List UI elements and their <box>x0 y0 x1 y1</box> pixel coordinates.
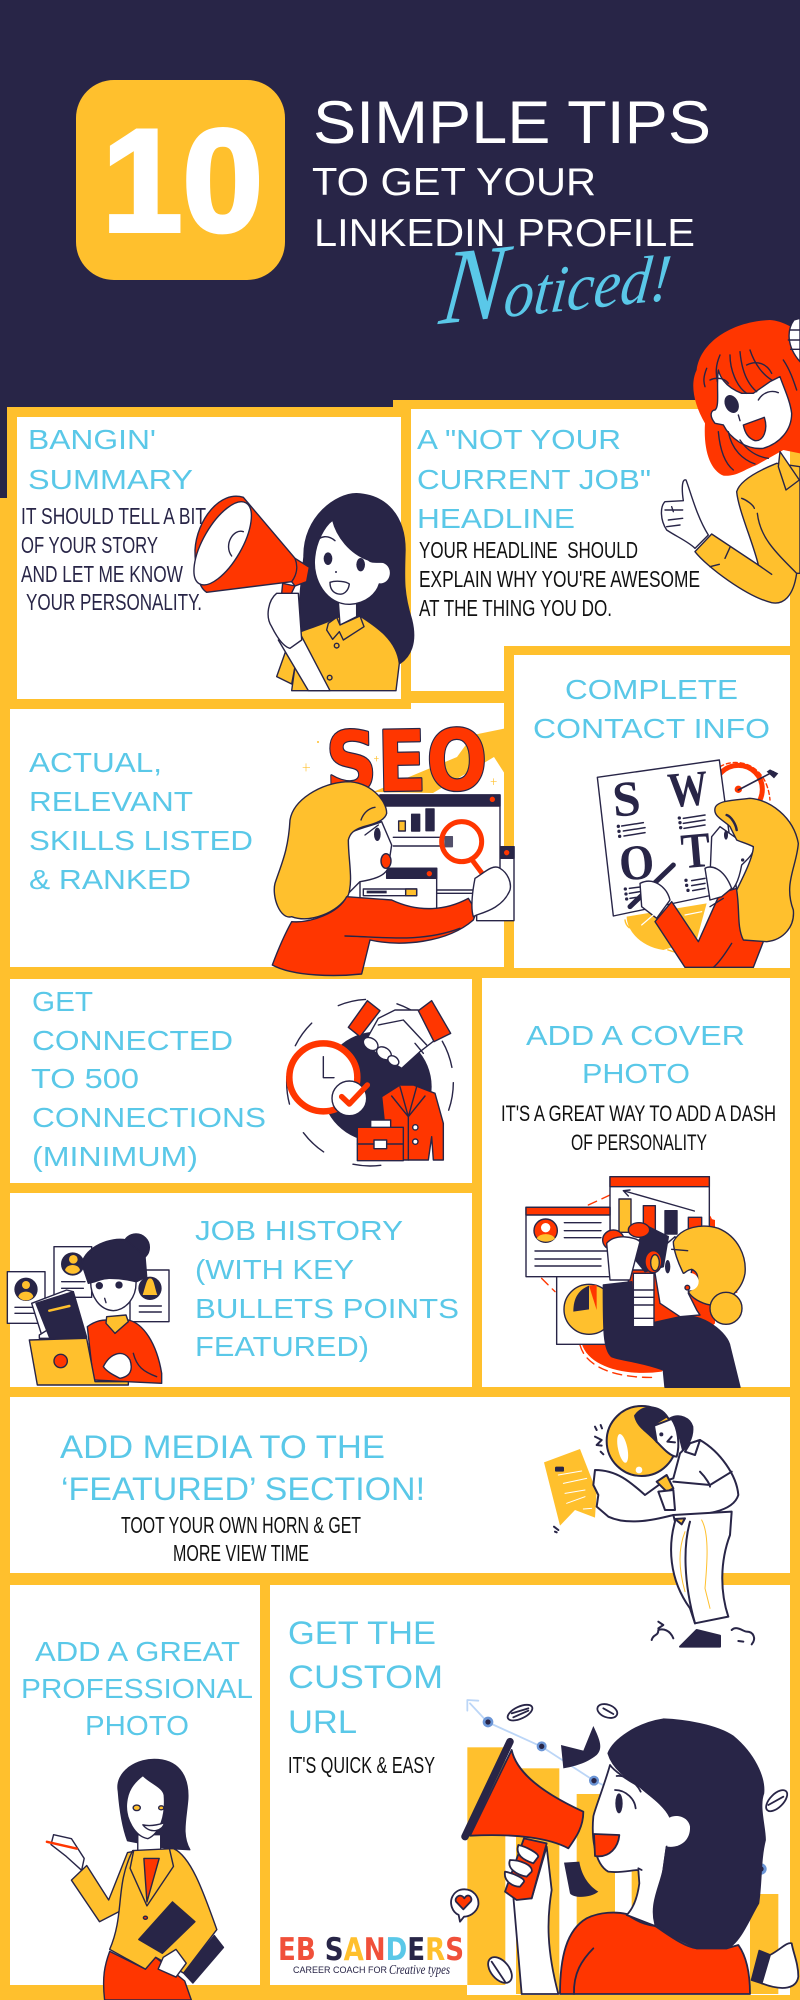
logo: EB Sanders: CAREER COACH FOR <box>293 1965 387 1976</box>
header <box>76 80 711 348</box>
title text: LINKEDIN PROFILE <box>314 212 695 255</box>
panel: job history: FEATURED) <box>195 1331 369 1362</box>
panel: complete contact info: COMPLETE <box>565 674 738 705</box>
panel: actual relevant skills: RELEVANT <box>29 786 193 817</box>
illustration: SWOT chart woman: O <box>617 833 656 892</box>
title text <box>312 89 711 255</box>
panel: job history: (WITH KEY <box>195 1254 354 1285</box>
illustration: SWOT chart woman: S <box>610 769 643 828</box>
illustration: SEO woman <box>272 711 514 975</box>
panel: not your current job headline: EXPLAIN WHY YOU'RE AWESOME <box>419 566 700 592</box>
panel: professional photo <box>10 1585 260 1985</box>
panel: get connected: CONNECTED <box>32 1025 233 1056</box>
panel: actual relevant skills <box>10 703 504 967</box>
panel: actual relevant skills: & RANKED <box>29 864 191 895</box>
panel: get connected: GET <box>32 986 93 1017</box>
illustration: SWOT chart woman: W <box>665 759 710 818</box>
illustration: woman with binoculars and charts <box>526 1177 745 1387</box>
panel: not your current job headline: YOUR HEADLINE SHOULD <box>419 537 638 563</box>
panel: add a cover photo <box>482 978 790 1387</box>
panel: not your current job headline: AT THE THING YOU DO. <box>419 595 612 621</box>
illustration: woman with megaphone <box>183 493 414 691</box>
panel: add a cover photo: ADD A COVER <box>526 1020 745 1051</box>
panel: add a cover photo: PHOTO <box>582 1058 690 1089</box>
panel: not your current job headline: A "NOT YOUR <box>417 424 621 455</box>
panel: bangin summary <box>7 407 411 709</box>
panel: complete contact info <box>504 646 800 978</box>
title text: SIMPLE TIPS <box>313 89 711 156</box>
number badge: 10 <box>102 99 263 262</box>
panel: custom url: URL <box>288 1704 357 1740</box>
title text: TO GET YOUR <box>312 161 596 204</box>
panel: get connected: CONNECTIONS <box>32 1102 266 1133</box>
panel: not your current job headline <box>393 400 800 703</box>
panel: professional photo: PROFESSIONAL <box>21 1673 253 1704</box>
panel: custom url: CUSTOM <box>288 1659 443 1695</box>
panel: add media <box>10 1397 790 1573</box>
SEO lettering: SEO <box>325 711 488 812</box>
panel: bangin summary: SUMMARY <box>28 464 193 495</box>
panel: add media: ‘FEATURED’ SECTION! <box>61 1471 425 1507</box>
illustration: winking woman with thumbs up <box>661 318 800 603</box>
panel: actual relevant skills: SKILLS LISTED <box>29 825 253 856</box>
panel: add media: MORE VIEW TIME <box>173 1540 309 1566</box>
panel: job history <box>10 1193 472 1387</box>
panel: actual relevant skills: ACTUAL, <box>29 747 162 778</box>
panel: get connected: (MINIMUM) <box>32 1141 198 1172</box>
panel: bangin summary: AND LET ME KNOW <box>21 561 183 587</box>
illustration: woman shouting into megaphone with bars <box>451 1700 798 1994</box>
panel: custom url <box>270 1585 790 1995</box>
panel: bangin summary: OF YOUR STORY <box>21 532 158 558</box>
panel: get connected <box>10 979 472 1183</box>
panel: complete contact info: CONTACT INFO <box>533 713 770 744</box>
panel: custom url: GET THE <box>288 1615 436 1651</box>
woman looking at screens <box>272 741 514 975</box>
panel: not your current job headline: HEADLINE <box>417 503 575 534</box>
panel: job history: BULLETS POINTS <box>195 1293 459 1324</box>
panel: not your current job headline: CURRENT JOB" <box>417 464 651 495</box>
panel: professional photo: ADD A GREAT <box>35 1636 240 1667</box>
illustration: SWOT chart woman: T <box>679 821 713 879</box>
logo: EB Sanders: Creative types <box>389 1963 450 1978</box>
panel: bangin summary: IT SHOULD TELL A BIT <box>21 503 206 529</box>
panel: bangin summary: BANGIN' <box>28 424 156 455</box>
illustration: handshake, clock and jacket icon <box>287 999 453 1166</box>
panel: add media: TOOT YOUR OWN HORN & GET <box>121 1512 361 1538</box>
logo: EB Sanders: EB SANDERS <box>278 1932 464 1968</box>
header background <box>0 0 800 498</box>
panel: add a cover photo: OF PERSONALITY <box>571 1130 707 1155</box>
script word: Noticed: Noticed! <box>435 204 679 348</box>
panel: job history: JOB HISTORY <box>195 1215 403 1246</box>
number badge <box>76 80 285 280</box>
illustration: businesswoman with folder <box>47 1759 223 2000</box>
panel: add media: ADD MEDIA TO THE <box>60 1429 385 1465</box>
illustration: SWOT chart woman <box>597 759 798 967</box>
illustration: woman with resumes and laptop <box>7 1234 169 1385</box>
panel: professional photo: PHOTO <box>85 1710 189 1741</box>
yellow growth arrow <box>373 727 512 793</box>
panel: bangin summary: YOUR PERSONALITY. <box>26 589 202 615</box>
illustration: man with magnifying glass <box>544 1406 754 1647</box>
panel: custom url: IT'S QUICK & EASY <box>288 1752 435 1778</box>
panel: get connected: TO 500 <box>31 1063 139 1094</box>
